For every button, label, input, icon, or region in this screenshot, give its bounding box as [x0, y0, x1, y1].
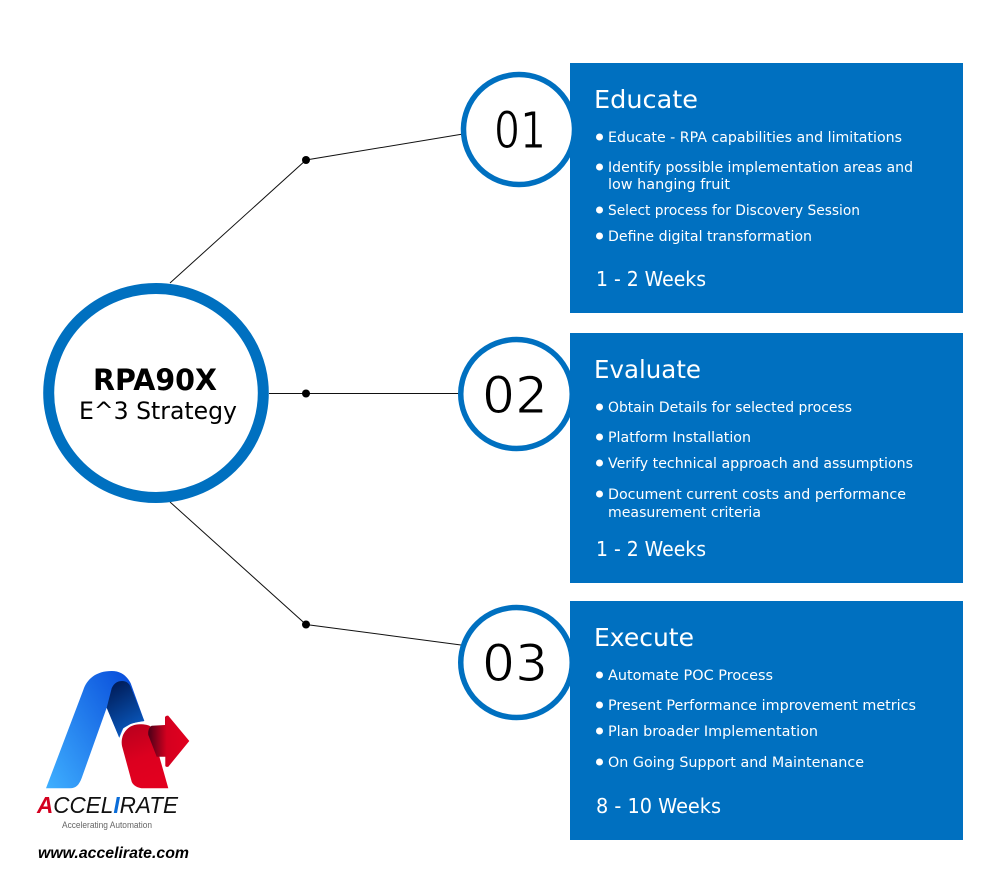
number circle 03: 03: [482, 635, 548, 694]
bullet list: Evaluate: [596, 400, 913, 521]
number circle 03: [461, 608, 572, 718]
number circle 01: 01: [494, 102, 546, 161]
panel: Evaluate: [570, 333, 963, 583]
number circle 01: [464, 74, 574, 184]
central circle: RPA90X E^3 Strategy: E^3 Strategy: [79, 397, 237, 425]
bullet list: Evaluate: measurement criteria: [608, 505, 761, 521]
tagline: Accelerating Automation: [62, 820, 152, 830]
connector: centre to Evaluate: [269, 390, 459, 398]
central circle: RPA90X E^3 Strategy: [49, 288, 263, 498]
heading: Educate: Educate: [594, 85, 698, 114]
bullet list: Educate: Select process for Discovery Session: [608, 203, 860, 219]
wordmark: ACCELIRATE: ACCELIRATE: [36, 792, 179, 818]
website: www.accelirate.com: [38, 845, 189, 862]
duration: Evaluate: 1 - 2 Weeks: [596, 537, 706, 561]
duration: Execute: 8 - 10 Weeks: [596, 794, 721, 818]
bullet list: Execute: Present Performance improvement metrics: [608, 698, 916, 714]
bullet list: Evaluate: Obtain Details for selected process: [608, 400, 852, 416]
number circle 02: [461, 340, 572, 448]
bullet list: Evaluate: Document current costs and performance: [608, 487, 906, 503]
central circle: RPA90X E^3 Strategy: RPA90X: [93, 363, 217, 397]
bullet list: Evaluate: Platform Installation: [608, 430, 751, 446]
connector: centre to Execute: [170, 502, 461, 645]
bullet list: Execute: Plan broader Implementation: [608, 724, 818, 740]
bullet list: Educate: [596, 130, 913, 245]
panel: Educate: [570, 63, 963, 313]
bullet list: Educate: Define digital transformation: [608, 229, 812, 245]
bullet list: Execute: Automate POC Process: [608, 668, 773, 684]
bullet list: Educate: Identify possible implementation areas and: [608, 160, 913, 176]
icon: logo mark: [46, 671, 189, 788]
bullet list: Educate: Educate - RPA capabilities and limitations: [608, 130, 902, 146]
bullet list: Execute: [596, 668, 916, 771]
panel: Execute: [570, 601, 963, 840]
heading: Execute: Execute: [594, 623, 694, 652]
heading: Evaluate: Evaluate: [594, 355, 701, 384]
connector: centre to Educate: [170, 134, 463, 283]
logo: Accelirate: [36, 671, 189, 862]
bullet list: Educate: low hanging fruit: [608, 177, 731, 193]
bullet list: Execute: On Going Support and Maintenance: [608, 755, 864, 771]
bullet list: Evaluate: Verify technical approach and assumptions: [608, 456, 913, 472]
number circle 02: 02: [482, 367, 548, 426]
duration: Educate: 1 - 2 Weeks: [596, 267, 706, 291]
